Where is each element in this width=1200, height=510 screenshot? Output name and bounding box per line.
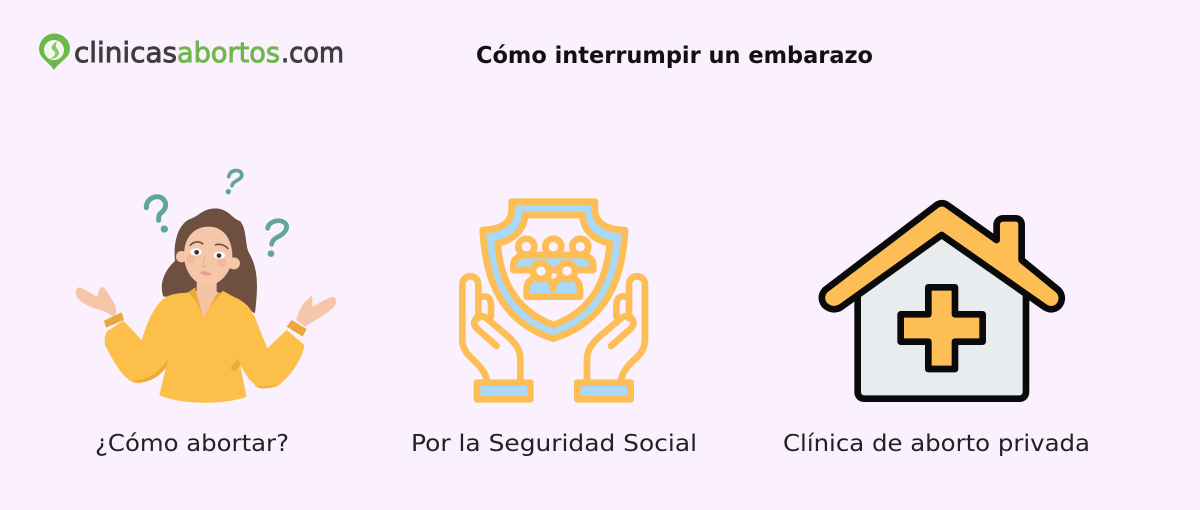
- title: Cómo interrumpir un embarazo: [476, 43, 873, 69]
- face: [184, 227, 232, 286]
- panel: Clínica de aborto privada: [783, 203, 1090, 457]
- shield: [483, 202, 625, 339]
- icon: green map pin: [39, 33, 70, 70]
- panel: ¿Cómo abortar?: [76, 170, 336, 457]
- cross: [901, 287, 983, 369]
- hands: [76, 287, 116, 317]
- illustration: confused woman: [76, 170, 336, 403]
- logo wordmark: [74, 36, 344, 69]
- label: Clínica de aborto privada: [783, 431, 1090, 457]
- icon: hands protecting shield with people: [462, 202, 645, 399]
- icon: question marks: [146, 170, 287, 244]
- panel: Por la Seguridad Social: [411, 202, 697, 457]
- eyes: [190, 248, 202, 256]
- logo wordmark: clinicas: [74, 36, 177, 69]
- icon: house with medical cross: [822, 203, 1062, 399]
- label: Por la Seguridad Social: [411, 431, 697, 457]
- logo: clinicasabortos.com: [39, 33, 344, 70]
- roof and chimney: [822, 203, 1062, 309]
- people group: [513, 239, 593, 297]
- neck: [191, 278, 223, 318]
- logo wordmark: abortos: [177, 36, 280, 69]
- sweater: [105, 288, 304, 403]
- cuffs: [477, 383, 530, 399]
- hands: [462, 276, 520, 380]
- logo wordmark: .com: [281, 36, 344, 69]
- hair: [162, 208, 257, 313]
- label: ¿Cómo abortar?: [95, 431, 289, 457]
- walls: [858, 232, 1026, 399]
